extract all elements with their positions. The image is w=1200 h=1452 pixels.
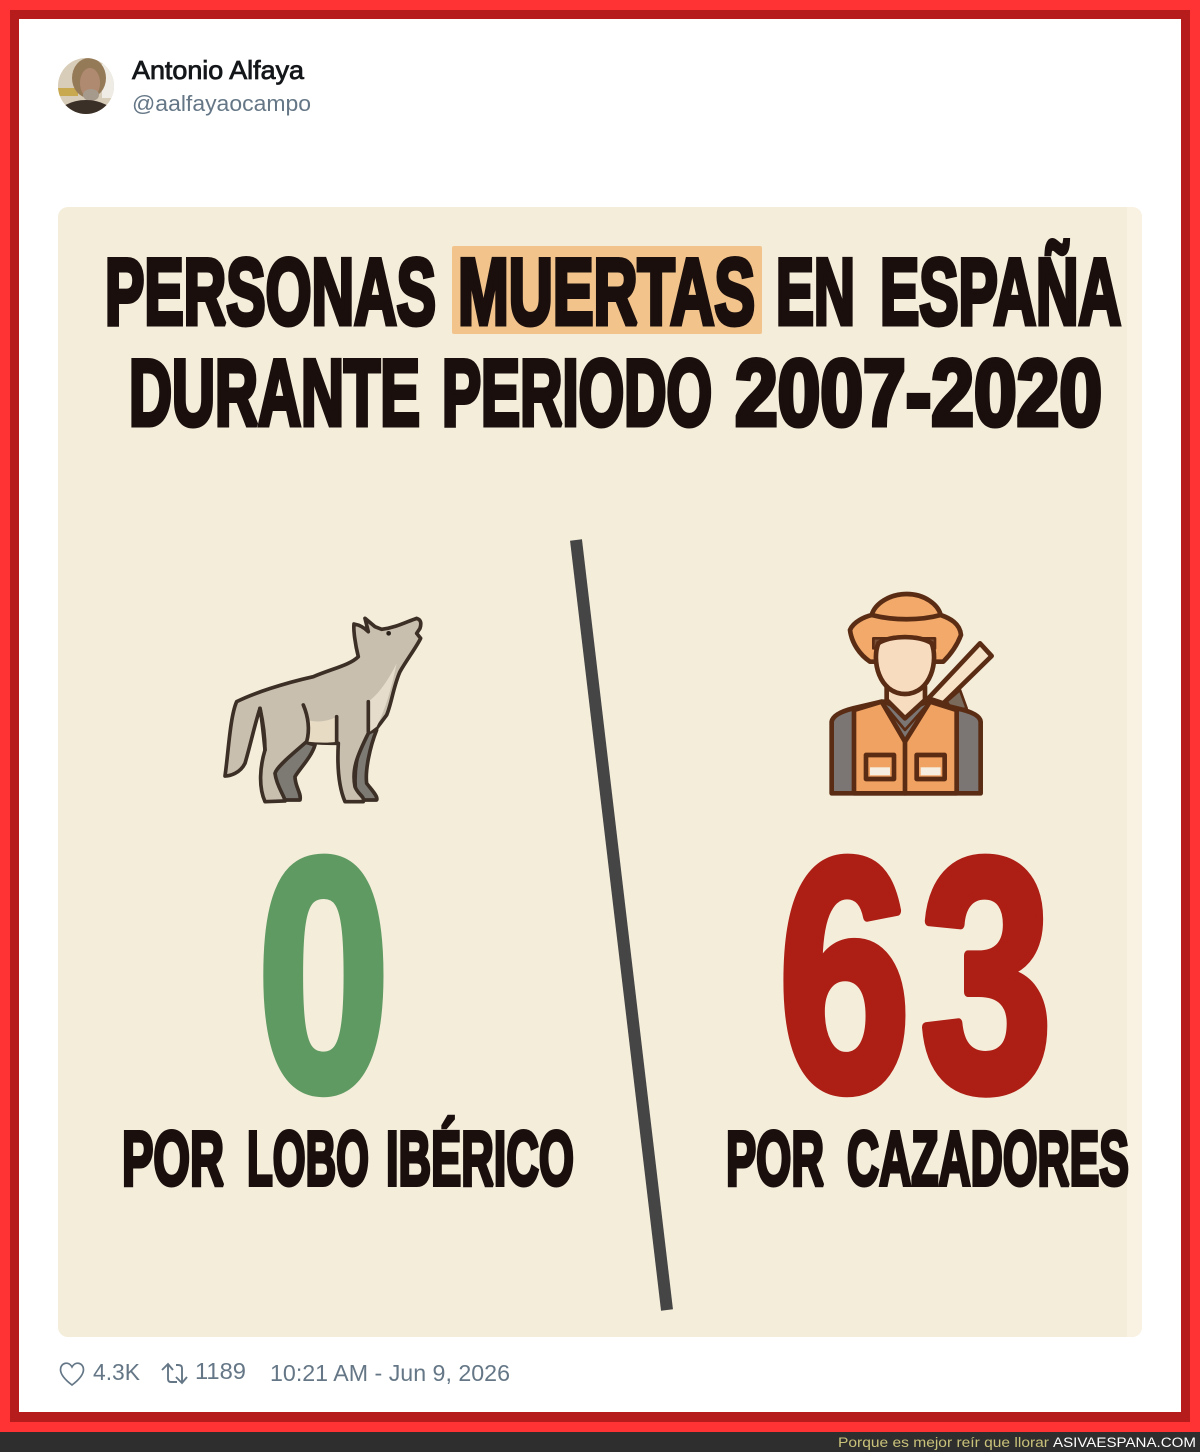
site name: ASIVAESPANA.COM: [1053, 1435, 1196, 1450]
number: 63 hunters: 63: [778, 791, 1052, 1159]
date: 10:21 AM - Jun 9, 2026: [270, 1360, 510, 1386]
title line 2: [129, 340, 1102, 445]
avatar: [58, 58, 114, 114]
infographic panel: [58, 207, 1142, 1337]
site slogan: Porque es mejor reír que llorar: [838, 1435, 1050, 1450]
label: wolf: POR: [122, 1116, 224, 1202]
title line 1: MUERTAS: [458, 239, 755, 344]
title highlight: [452, 246, 762, 334]
title line 2: 2007-2020: [735, 340, 1102, 445]
title line 2: PERIODO: [442, 340, 712, 445]
icon: heart: [60, 1363, 84, 1385]
retweet count: 1189: [195, 1358, 246, 1384]
title line 2: DURANTE: [129, 340, 420, 445]
icon: wolf: [225, 618, 421, 802]
label: wolf: IBÉRICO: [386, 1116, 574, 1202]
bottom site bar: [0, 1432, 1200, 1452]
number: 0 wolves: 0: [258, 791, 390, 1159]
label: hunters: POR: [726, 1116, 824, 1202]
title line 1: [105, 239, 1121, 344]
title line 1: PERSONAS: [105, 239, 436, 344]
label: wolf: [122, 1116, 574, 1202]
title line 1: EN: [776, 239, 855, 344]
author handle: @aalfayaocampo: [132, 91, 311, 116]
icon: retweet: [162, 1364, 187, 1383]
label: wolf: LOBO: [247, 1116, 369, 1202]
label: hunters: [726, 1116, 1129, 1202]
icon: hunter: [832, 594, 992, 793]
diagonal divider: [576, 540, 667, 1310]
likes count: 4.3K: [93, 1359, 141, 1385]
tweet stats: [60, 1358, 510, 1386]
author name: Antonio Alfaya: [132, 55, 305, 85]
